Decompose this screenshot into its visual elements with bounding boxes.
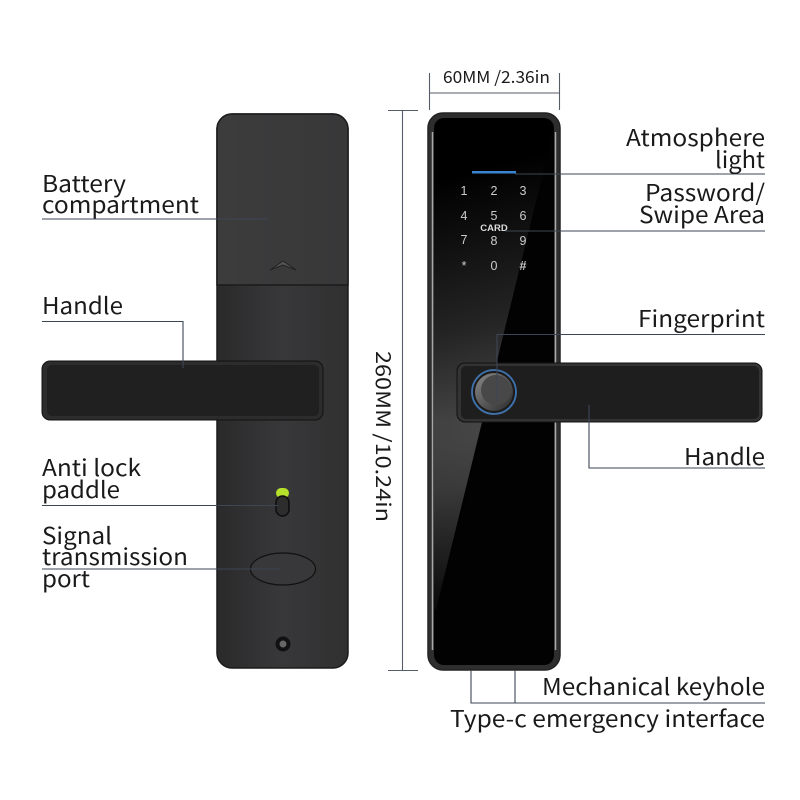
label: password swipe area — [639, 174, 765, 230]
label: signal transmission port — [42, 517, 188, 594]
keypad: # — [520, 259, 527, 273]
glass reflection — [434, 118, 553, 610]
keypad: 8 — [491, 234, 498, 248]
label: password swipe area: Swipe Area — [639, 196, 765, 230]
keypad: CARD — [480, 223, 508, 234]
width dimension lines — [430, 73, 560, 110]
front handle — [457, 363, 762, 422]
keypad: 2 — [491, 184, 498, 198]
height dimension — [370, 110, 418, 670]
back handle — [42, 361, 323, 420]
front plate — [428, 113, 560, 670]
back plate — [217, 114, 348, 668]
front panel lock — [428, 113, 762, 670]
label: mechanical keyhole: Mechanical keyhole — [542, 668, 765, 702]
label: fingerprint: Fingerprint — [638, 300, 765, 334]
keypad: 5 — [491, 209, 498, 223]
label: anti lock paddle — [42, 449, 141, 505]
bottom screw hole — [276, 636, 290, 652]
label: type-c emergency interface: Type-c emergency interface — [450, 700, 765, 734]
icon: cover arrow — [270, 261, 296, 270]
fingerprint sensor — [472, 370, 516, 414]
battery cover — [217, 114, 348, 285]
keypad: 3 — [520, 184, 527, 198]
keypad: 0 — [491, 259, 498, 273]
label: battery compartment — [42, 165, 199, 220]
keypad — [461, 184, 527, 273]
anti lock paddle — [276, 488, 289, 516]
keypad: 6 — [520, 209, 527, 223]
label: anti lock paddle: Anti lock — [42, 449, 141, 483]
keypad: * — [462, 259, 467, 273]
height dimension lines — [388, 110, 418, 670]
keypad: 9 — [520, 234, 527, 248]
width dimension — [430, 64, 560, 110]
label: atmosphere light: Atmosphere — [626, 119, 765, 153]
signal transmission port — [250, 553, 316, 585]
bezel highlights — [432, 132, 556, 650]
glass face — [434, 118, 554, 665]
label: atmosphere light: light — [715, 141, 765, 175]
label: atmosphere light — [626, 119, 765, 175]
label: anti lock paddle: paddle — [42, 471, 120, 505]
label: battery compartment: compartment — [42, 186, 199, 220]
label: handle left: Handle — [42, 287, 123, 321]
label: battery compartment: Battery — [42, 165, 126, 199]
back panel lock — [42, 114, 348, 668]
atmosphere light — [472, 171, 516, 174]
label: handle right: Handle — [684, 438, 765, 472]
label: signal transmission port: Signal — [42, 517, 112, 551]
width label: 60MM /2.36in — [443, 64, 550, 88]
keypad: 7 — [461, 233, 468, 247]
label: password swipe area: Password/ — [645, 174, 765, 208]
label: signal transmission port: transmission — [42, 538, 188, 572]
keypad: 1 — [461, 184, 468, 198]
height label: 260MM /10.24in — [370, 351, 399, 522]
callout leader lines — [42, 174, 765, 703]
keypad: 4 — [461, 209, 468, 223]
label: signal transmission port: port — [42, 560, 90, 594]
